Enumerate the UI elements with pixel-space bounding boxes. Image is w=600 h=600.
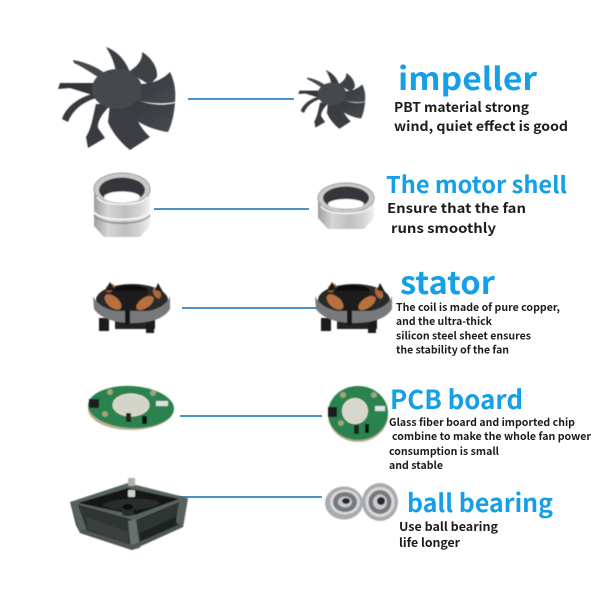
text: impeller description: PBT material strong xyxy=(394,96,529,116)
text: PCB description: and stable xyxy=(389,458,443,473)
icon: large motor shell xyxy=(94,173,150,237)
text: impeller description xyxy=(394,96,568,135)
icon: large PCB xyxy=(87,384,175,430)
heading: ball bearing: ball bearing xyxy=(407,484,553,520)
row: motor shell xyxy=(94,166,567,237)
icon: ball bearings xyxy=(325,483,398,521)
text: stator description xyxy=(396,300,560,358)
text: motor shell description: runs smoothly xyxy=(391,217,496,237)
row: PCB board xyxy=(87,380,591,473)
text: PCB description: consumption is small xyxy=(389,444,500,459)
heading: the motor shell: The motor shell xyxy=(386,166,567,200)
text: PCB description: Glass fiber board and imported chip xyxy=(389,415,575,430)
text: stator description: the stability of the fan xyxy=(396,342,509,358)
icon: large impeller xyxy=(58,47,175,150)
text: motor shell description xyxy=(387,197,526,237)
icon: small motor shell xyxy=(318,183,374,229)
heading: PCB board: PCB board xyxy=(390,380,523,417)
icon: small PCB xyxy=(328,386,388,442)
text: ball bearing description: life longer xyxy=(399,534,461,551)
text: ball bearing description: Use ball bearing xyxy=(399,518,498,535)
text: PCB description xyxy=(389,415,591,473)
icon: small impeller xyxy=(298,70,365,129)
heading: stator: stator xyxy=(400,258,496,303)
row: stator xyxy=(93,258,560,358)
text: PCB description: combine to make the whole fan power xyxy=(392,429,591,444)
row: ball bearing xyxy=(70,478,553,551)
row: impeller xyxy=(58,47,568,150)
text: stator description: silicon steel sheet ensures xyxy=(396,328,531,344)
icon: fan housing xyxy=(70,478,188,550)
icon: large stator xyxy=(93,282,170,333)
text: motor shell description: Ensure that the fan xyxy=(387,197,526,217)
connector lines xyxy=(135,99,322,497)
text: stator description: The coil is made of pure copper, xyxy=(396,300,560,315)
text: ball bearing description xyxy=(399,518,498,551)
text: impeller description: wind, quiet effect is good xyxy=(394,115,568,135)
heading: impeller: impeller xyxy=(398,54,538,99)
icon: small stator xyxy=(315,282,392,333)
text: stator description: and the ultra-thick xyxy=(396,314,493,329)
